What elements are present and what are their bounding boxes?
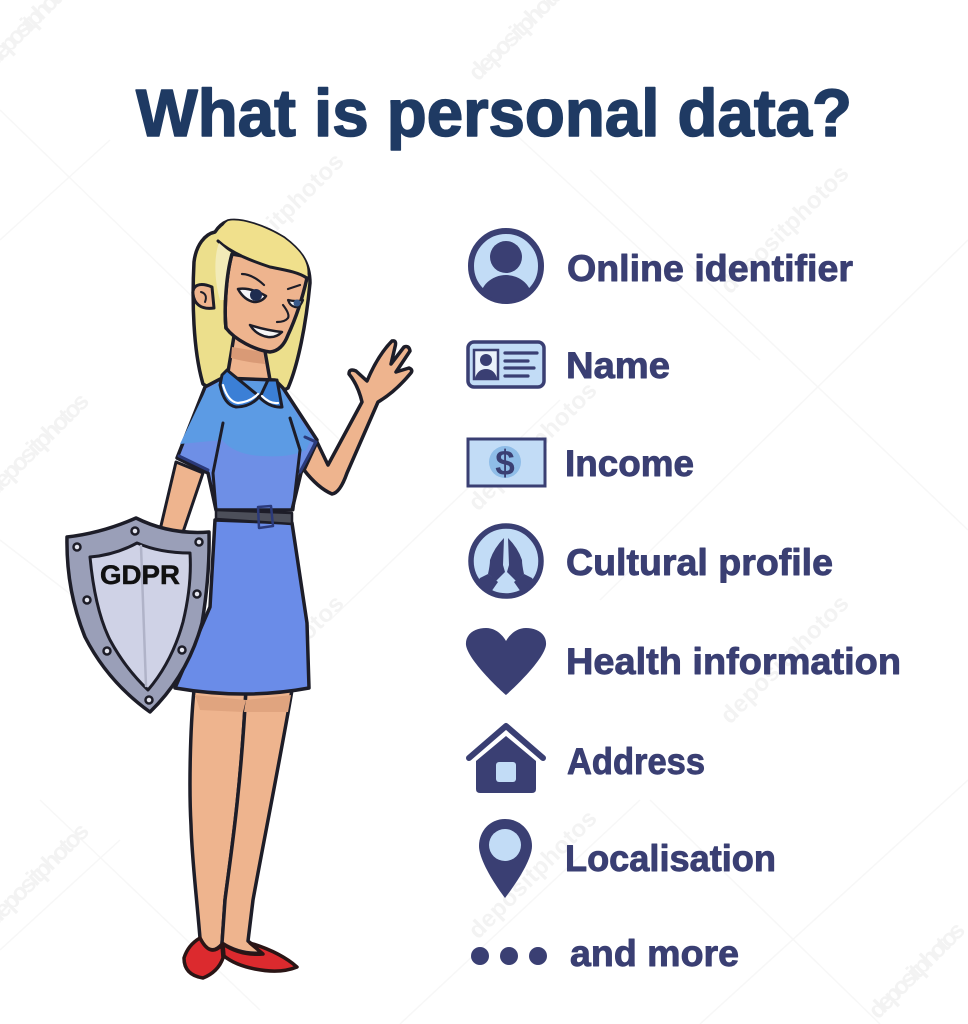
collar bbox=[220, 370, 282, 407]
shield label: GDPR bbox=[100, 560, 180, 590]
text: depositphotos bbox=[210, 590, 349, 729]
list item: name bbox=[468, 342, 670, 387]
list item: localisation: Localisation bbox=[565, 838, 776, 879]
list item: and more: and more bbox=[570, 933, 739, 974]
illustration: woman with GDPR shield bbox=[67, 220, 412, 978]
icon: heart bbox=[466, 628, 546, 695]
icon: user avatar bbox=[468, 228, 544, 304]
skirt bbox=[175, 520, 309, 694]
list item: address bbox=[469, 726, 705, 793]
list item: online identifier bbox=[468, 228, 853, 304]
red shoes bbox=[184, 938, 297, 978]
neck bbox=[228, 330, 270, 397]
icon: banknote bbox=[468, 439, 545, 486]
left arm behind shield bbox=[160, 462, 203, 535]
blue dress top bbox=[177, 378, 317, 510]
text: depositphotos bbox=[863, 917, 968, 1024]
face bbox=[225, 254, 307, 352]
text: depositphotos bbox=[463, 805, 602, 944]
belt bbox=[216, 506, 292, 528]
text: depositphotos bbox=[463, 377, 602, 516]
shield bbox=[67, 518, 209, 712]
icon: banknote: $ bbox=[495, 444, 515, 483]
text: depositphotos bbox=[210, 148, 349, 287]
list item: health information: Health information bbox=[566, 641, 901, 682]
icon: house bbox=[469, 726, 543, 793]
eyes, brows, nose, mouth bbox=[238, 289, 266, 302]
icon: map pin bbox=[479, 819, 532, 898]
list item: income: Income bbox=[565, 443, 694, 484]
list item: online identifier: Online identifier bbox=[567, 248, 853, 289]
list item: health information bbox=[466, 628, 901, 695]
list item: cultural profile bbox=[471, 526, 833, 596]
list item: cultural profile: Cultural profile bbox=[566, 542, 833, 583]
long hair bbox=[193, 220, 310, 398]
icon: three dots bbox=[471, 947, 547, 965]
list item: localisation bbox=[479, 819, 776, 898]
list item: name: Name bbox=[566, 345, 670, 386]
icon: praying hands bbox=[471, 526, 541, 596]
ear bbox=[193, 285, 214, 308]
list item: address: Address bbox=[567, 741, 705, 782]
text: depositphotos bbox=[715, 590, 854, 729]
legs bbox=[190, 690, 292, 953]
waving arm and hand bbox=[304, 341, 412, 494]
text: depositphotos bbox=[715, 160, 854, 299]
icon: ID card bbox=[468, 342, 544, 387]
list item: and more bbox=[471, 933, 739, 974]
list item: income bbox=[468, 439, 694, 486]
title: What is personal data? bbox=[136, 76, 852, 151]
fringe bbox=[218, 220, 308, 278]
